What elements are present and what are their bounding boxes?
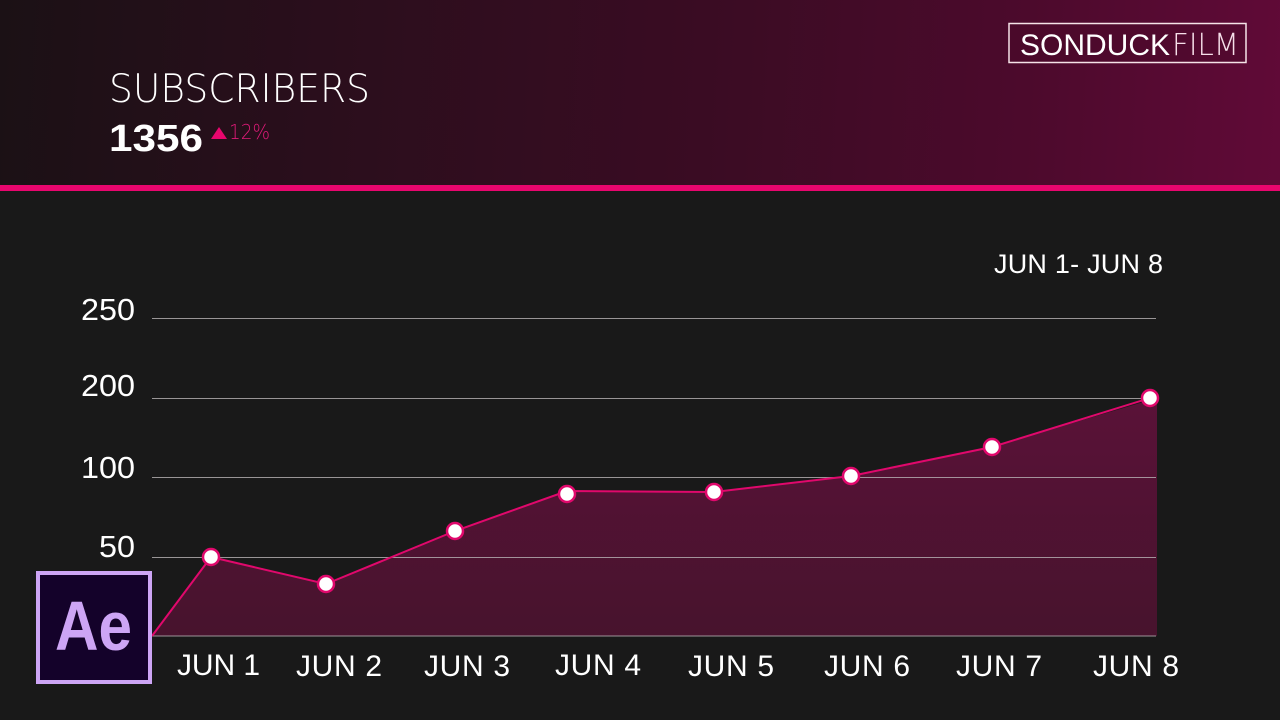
x axis labels: JUN 8 <box>1093 650 1179 683</box>
x axis labels: JUN 3 <box>424 650 510 683</box>
chart area fill <box>152 398 1157 636</box>
line chart <box>81 292 1179 683</box>
logo: sonduckfilm: FILM <box>1172 28 1239 63</box>
header panel <box>0 0 1280 191</box>
x axis labels: JUN 2 <box>296 650 382 683</box>
x axis labels: JUN 6 <box>824 650 910 683</box>
data line <box>152 398 1150 636</box>
icon: up triangle <box>211 127 227 139</box>
percent change: 12% <box>229 120 270 144</box>
x axis labels <box>177 649 1179 683</box>
y axis labels: 250 <box>81 292 135 327</box>
y axis labels: 50 <box>99 529 135 564</box>
y axis labels: 200 <box>81 368 135 403</box>
x axis labels: JUN 5 <box>688 650 774 683</box>
date range label: JUN 1- JUN 8 <box>994 249 1163 279</box>
x axis labels: JUN 1 <box>177 649 260 682</box>
data points <box>203 390 1158 592</box>
grid lines <box>152 318 1156 636</box>
icon: after effects logo: Ae <box>55 587 132 665</box>
x axis labels: JUN 4 <box>555 649 641 682</box>
x axis labels: JUN 7 <box>956 650 1042 683</box>
logo: sonduckfilm: SONDUCK <box>1020 29 1170 62</box>
title: subscribers: SUBSCRIBERS <box>109 67 370 112</box>
y axis labels <box>81 292 135 564</box>
icon: after effects logo <box>38 573 150 682</box>
y axis labels: 100 <box>81 450 135 485</box>
logo: sonduckfilm <box>1009 24 1246 63</box>
subscriber count: 1356 <box>109 118 203 160</box>
